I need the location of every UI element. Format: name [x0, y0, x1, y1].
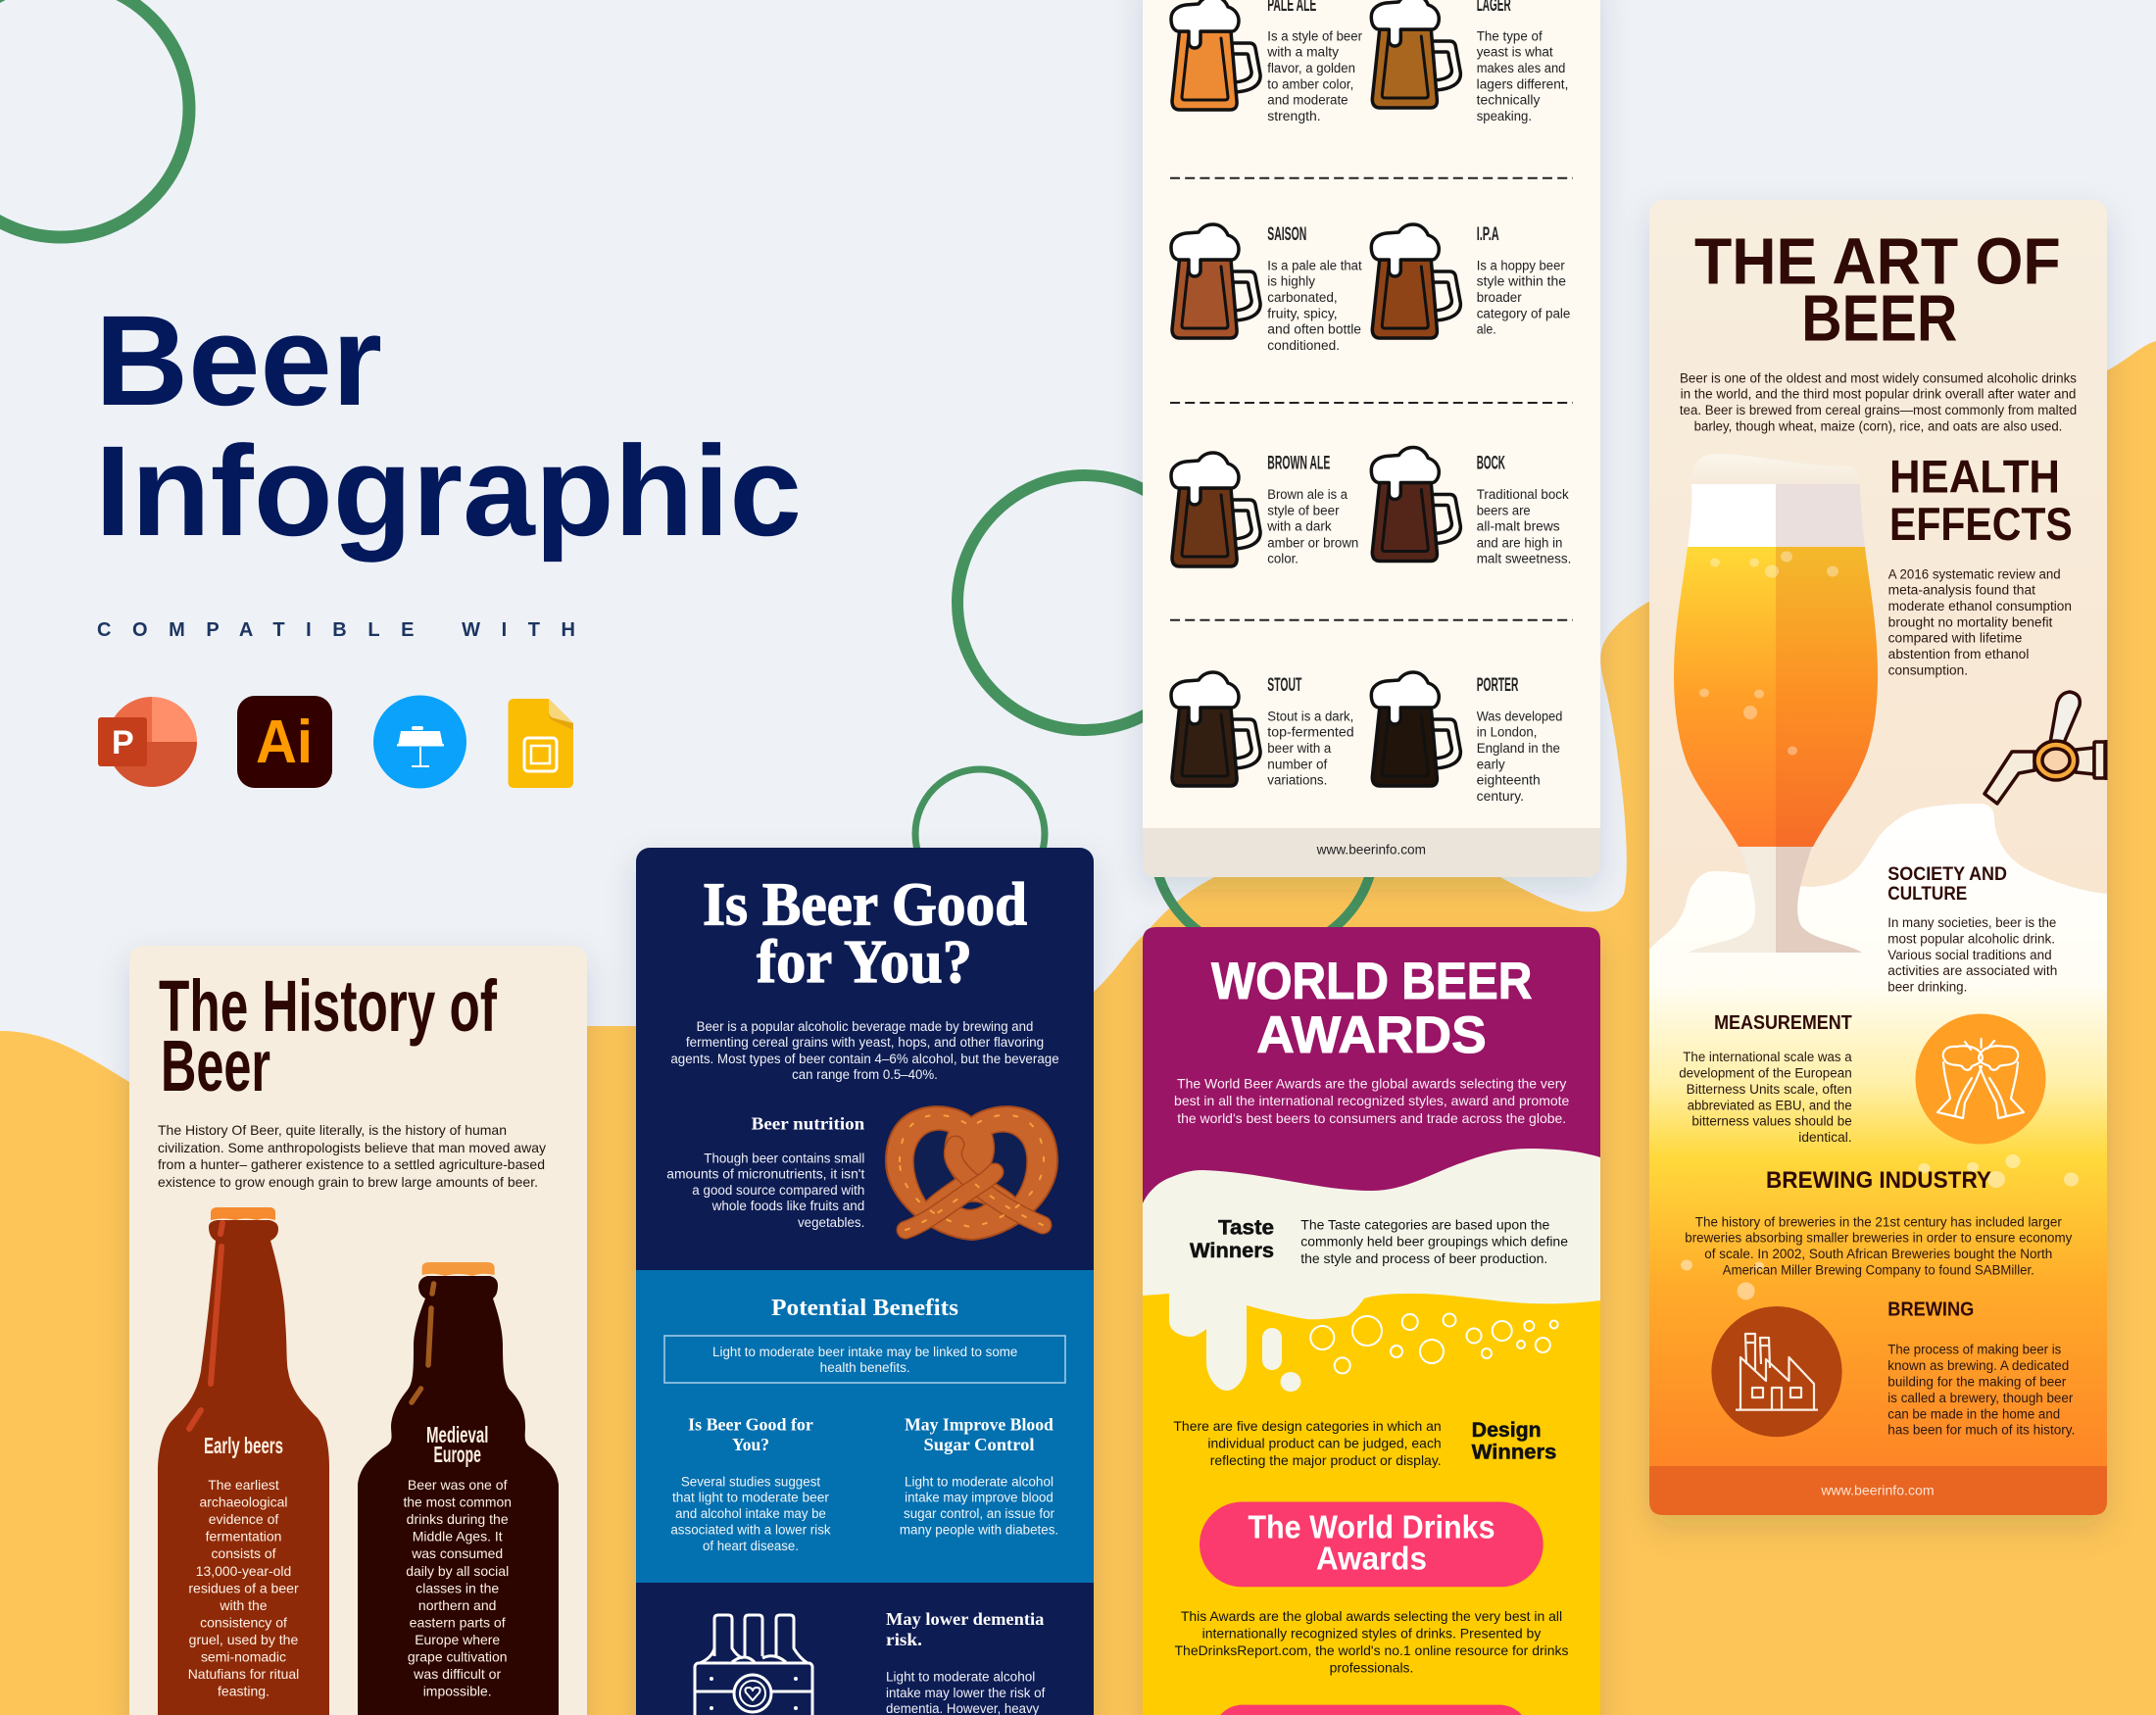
- style: brown ale: Brown ale is a: [1267, 487, 1348, 502]
- style: stout: Stout is a dark,: [1267, 709, 1353, 723]
- heading: the art of beer: THE ART OF: [1694, 224, 2061, 298]
- style: porter: PORTER: [1477, 675, 1519, 696]
- style: brown ale: with a dark: [1266, 519, 1332, 534]
- icon: Google Slides: [508, 699, 573, 788]
- taste winners: The Taste categories are based upon the: [1300, 1216, 1550, 1232]
- style: brown ale: BROWN ALE: [1267, 453, 1330, 473]
- panel: beer styles: [1143, 0, 1600, 877]
- art intro: Beer is one of the oldest and most widely consumed alcoholic drinks: [1680, 371, 2077, 386]
- measurement: MEASUREMENT: [1714, 1012, 1852, 1034]
- icon: cheers: [1915, 1013, 2046, 1145]
- style: saison: and often bottle: [1267, 322, 1361, 337]
- green ring behind awards card: [1153, 731, 1375, 953]
- green ring top left: [0, 0, 189, 237]
- health effects: A 2016 systematic review and: [1888, 566, 2061, 581]
- style: brown ale: amber or brown: [1267, 535, 1358, 550]
- style: ipa: [1371, 224, 1570, 338]
- footer url: www.beerinfo.com: [1820, 1483, 1935, 1497]
- beer nutrition text: a good source compared with: [692, 1183, 864, 1198]
- style: brown ale: color.: [1267, 551, 1298, 565]
- health effects: EFFECTS: [1889, 498, 2073, 550]
- society and culture: [1887, 864, 2057, 995]
- design winners: There are five design categories in which an: [1173, 1418, 1442, 1434]
- green ring centre large: [957, 475, 1212, 730]
- bottle: medieval europe: [358, 1262, 559, 1715]
- style: pale ale: [1171, 0, 1362, 123]
- style: saison: fruity, spicy,: [1267, 306, 1338, 320]
- style: ipa: category of pale: [1477, 306, 1570, 320]
- intro text: Beer is a popular alcoholic beverage made by brewing and: [697, 1019, 1033, 1034]
- style: pale ale: to amber color,: [1267, 76, 1353, 91]
- benefit: blood sugar control: sugar control, an issue for: [904, 1506, 1054, 1521]
- bottle: medieval europe: the most common: [403, 1494, 512, 1510]
- style: bock: [1371, 447, 1571, 565]
- awards intro: the world's best beers to consumers and trade across the globe.: [1177, 1110, 1566, 1126]
- society and culture: CULTURE: [1887, 884, 1967, 905]
- style: brown ale: style of beer: [1267, 503, 1340, 517]
- society and culture: SOCIETY AND: [1887, 864, 2007, 885]
- health effects: moderate ethanol consumption: [1888, 599, 2072, 613]
- society and culture: Various social traditions and: [1887, 948, 2052, 962]
- style: saison: [1171, 224, 1362, 353]
- title: [95, 288, 802, 563]
- heading: potential benefits: Potential Benefits: [771, 1296, 958, 1321]
- brewing industry: American Miller Brewing Company to found SABMiller.: [1723, 1262, 2034, 1277]
- benefit: blood sugar control: [900, 1415, 1058, 1537]
- benefit: is beer good for you: [670, 1415, 831, 1553]
- icon: Keynote: [373, 696, 466, 788]
- awards intro: best in all the international recognized styles, award and promote: [1174, 1093, 1570, 1108]
- bottle: early beers: semi-nomadic: [201, 1648, 286, 1664]
- taste winners: commonly held beer groupings which define: [1300, 1233, 1568, 1249]
- society and culture: In many societies, beer is the: [1887, 915, 2056, 930]
- heading: the art of beer: BEER: [1801, 282, 1957, 355]
- intro text: [670, 1019, 1059, 1082]
- drinks awards text: professionals.: [1330, 1660, 1413, 1676]
- measurement: The international scale was a: [1683, 1050, 1852, 1064]
- style: lager: technically: [1477, 93, 1541, 108]
- icon: bottle crate: [695, 1615, 812, 1715]
- bottle: early beers: archaeological: [200, 1494, 288, 1510]
- heading: the art of beer: [1694, 224, 2061, 355]
- bottle: medieval europe: Europe where: [415, 1632, 500, 1647]
- bottle: early beers: [158, 1207, 329, 1715]
- beer nutrition text: [666, 1113, 865, 1230]
- heading: is beer good for you: for You?: [757, 929, 972, 996]
- dementia text: May lower dementia: [886, 1609, 1045, 1629]
- icon: beer tap: [1984, 692, 2106, 804]
- measurement: [1679, 1012, 1852, 1145]
- style: stout: variations.: [1267, 773, 1327, 788]
- benefit: is beer good for you: of heart disease.: [703, 1539, 799, 1553]
- art intro: [1680, 371, 2077, 434]
- heading: is beer good for you: Is Beer Good: [703, 872, 1027, 939]
- panel: the art of beer: [1649, 200, 2107, 1515]
- taste winners: Winners: [1190, 1240, 1274, 1262]
- brewing industry: BREWING INDUSTRY: [1766, 1167, 1991, 1194]
- pill: second, cropped: [1213, 1705, 1529, 1715]
- health effects: compared with lifetime: [1888, 630, 2022, 645]
- intro text: fermenting cereal grains with yeast, hops, and other flavoring: [686, 1035, 1044, 1050]
- style: saison: carbonated,: [1267, 290, 1338, 305]
- style: porter: eighteenth: [1477, 773, 1541, 788]
- awards intro: The World Beer Awards are the global awards selecting the very: [1177, 1075, 1566, 1091]
- callout box: [664, 1336, 1065, 1383]
- brewing: is called a brewery, though beer: [1887, 1391, 2074, 1405]
- bottle: early beers: residues of a beer: [188, 1580, 299, 1595]
- bottle: medieval europe: Europe: [433, 1442, 481, 1467]
- beer nutrition text: Though beer contains small: [704, 1151, 864, 1165]
- taste winners: the style and process of beer production.: [1300, 1250, 1547, 1266]
- taste winners: [1190, 1216, 1568, 1266]
- subtitle: compatible with: COMPATIBLE WITH: [97, 619, 575, 641]
- beer nutrition text: amounts of micronutrients, it isn't: [666, 1166, 865, 1182]
- art intro: barley, though wheat, maize (corn), rice, and oats are also used.: [1694, 419, 2062, 434]
- style: porter: century.: [1477, 789, 1524, 804]
- pill: the world drinks awards: Awards: [1316, 1541, 1427, 1577]
- health effects: consumption.: [1888, 662, 1968, 677]
- style: porter: in London,: [1477, 725, 1537, 740]
- bottle: early beers: gruel, used by the: [189, 1632, 299, 1647]
- design winners: reflecting the major product or display.: [1210, 1452, 1442, 1468]
- style: porter: early: [1477, 757, 1505, 771]
- benefit: blood sugar control: Light to moderate alcohol: [905, 1474, 1054, 1490]
- section: potential benefits: [636, 1270, 1094, 1583]
- bottle: early beers: fermentation: [206, 1529, 281, 1544]
- bottle: early beers: evidence of: [209, 1511, 278, 1527]
- intro text: agents. Most types of beer contain 4–6% alcohol, but the beverage: [670, 1052, 1059, 1066]
- panel: world beer awards: [1143, 927, 1600, 1715]
- brewing industry: The history of breweries in the 21st century has included larger: [1695, 1214, 2062, 1229]
- bottle: medieval europe: impossible.: [423, 1684, 492, 1699]
- art intro: tea. Beer is brewed from cereal grains—most commonly from malted: [1680, 403, 2077, 417]
- brewing industry: of scale. In 2002, South African Breweries bought the North: [1704, 1247, 2052, 1261]
- bubbles in beer: [1681, 1154, 2079, 1299]
- taste winners: Taste: [1218, 1217, 1274, 1239]
- style: bock: and are high in: [1477, 535, 1562, 550]
- bottle: early beers: Early beers: [204, 1433, 283, 1458]
- style: lager: makes ales and: [1477, 61, 1565, 75]
- bottle: medieval europe: Middle Ages. It: [413, 1529, 503, 1544]
- drinks awards text: internationally recognized styles of drinks. Presented by: [1202, 1626, 1541, 1642]
- style: pale ale: Is a style of beer: [1267, 28, 1362, 43]
- history intro text: civilization. Some anthropologists believe that man moved away: [158, 1140, 546, 1155]
- style: ipa: broader: [1477, 290, 1522, 305]
- heading: world beer awards: AWARDS: [1256, 1006, 1487, 1064]
- style: stout: top-fermented: [1267, 725, 1354, 740]
- bottle: medieval europe: Medieval: [426, 1422, 488, 1447]
- benefit: blood sugar control: intake may improve blood: [905, 1490, 1054, 1505]
- art intro: in the world, and the third most popular drink overall after water and: [1681, 387, 2076, 402]
- history intro text: The History Of Beer, quite literally, is the history of human: [158, 1122, 507, 1138]
- title: Beer: [95, 288, 382, 432]
- measurement: development of the European: [1679, 1065, 1852, 1080]
- brewing: The process of making beer is: [1887, 1343, 2062, 1357]
- style: saison: SAISON: [1267, 224, 1306, 245]
- bottle: medieval europe: was consumed: [411, 1545, 503, 1561]
- bottle: medieval europe: daily by all social: [406, 1563, 509, 1579]
- style: stout: [1171, 672, 1354, 788]
- style: ipa: ale.: [1477, 322, 1496, 337]
- style: lager: yeast is what: [1477, 45, 1553, 60]
- style: porter: Was developed: [1477, 709, 1562, 723]
- brewing: building for the making of beer: [1887, 1375, 2067, 1390]
- style: pale ale: flavor, a golden: [1267, 61, 1355, 75]
- heading: world beer awards: WORLD BEER: [1211, 953, 1532, 1010]
- style: lager: lagers different,: [1477, 76, 1568, 91]
- health effects: abstention from ethanol: [1888, 647, 2029, 662]
- society and culture: activities are associated with: [1887, 963, 2057, 978]
- history intro text: from a hunter– gatherer existence to a settled agriculture-based: [158, 1156, 545, 1172]
- style: bock: beers are: [1477, 503, 1531, 517]
- bottle: early beers: feasting.: [218, 1684, 270, 1699]
- bubbles: [1310, 1313, 1558, 1373]
- foam wave: [1143, 1149, 1600, 1392]
- style: stout: number of: [1267, 757, 1328, 771]
- style: pale ale: strength.: [1267, 109, 1321, 123]
- brewing: known as brewing. A dedicated: [1887, 1358, 2069, 1373]
- bottle: medieval europe: drinks during the: [407, 1511, 509, 1527]
- pill: the world drinks awards: [1200, 1501, 1544, 1587]
- icon: Illustrator: [237, 696, 332, 788]
- beer nutrition text: Beer nutrition: [752, 1113, 865, 1133]
- illustration: beer glass: [1674, 454, 1878, 953]
- icon: pretzel: [886, 1106, 1057, 1240]
- icon: PowerPoint: P: [112, 724, 134, 761]
- dementia text: risk.: [886, 1630, 922, 1649]
- heading: is beer good for you: [703, 872, 1027, 996]
- panel: the history of beer: [129, 946, 587, 1715]
- bottle: medieval europe: grape cultivation: [408, 1648, 508, 1664]
- benefit: is beer good for you: You?: [732, 1435, 769, 1454]
- dementia text: intake may lower the risk of: [886, 1686, 1046, 1700]
- health effects: brought no mortality benefit: [1888, 614, 2053, 629]
- icon: PowerPoint: [98, 697, 197, 787]
- bottle: medieval europe: Beer was one of: [408, 1477, 508, 1493]
- icon: brewery factory: [1711, 1306, 1842, 1437]
- dementia text: Light to moderate alcohol: [886, 1670, 1035, 1685]
- history intro text: existence to grow enough grain to brew large amounts of beer.: [158, 1174, 538, 1190]
- style: pale ale: with a malty: [1266, 45, 1339, 60]
- footer band: [1649, 1466, 2107, 1515]
- measurement: abbreviated as EBU, and the: [1688, 1098, 1852, 1112]
- design winners: [1173, 1418, 1556, 1468]
- heading: the history of beer: The History of: [159, 965, 497, 1047]
- style: bock: malt sweetness.: [1477, 551, 1571, 565]
- measurement: Bitterness Units scale, often: [1687, 1082, 1852, 1097]
- drinks awards text: TheDrinksReport.com, the world's no.1 online resource for drinks: [1174, 1642, 1568, 1658]
- style: ipa: style within the: [1477, 274, 1566, 289]
- style: brown ale: [1171, 453, 1358, 566]
- brewing: BREWING: [1887, 1299, 1974, 1321]
- brewing industry: [1685, 1167, 2073, 1277]
- health effects: meta-analysis found that: [1888, 582, 2035, 597]
- heading: the history of beer: [159, 965, 497, 1106]
- callout box: Light to moderate beer intake may be linked to some: [712, 1345, 1017, 1359]
- bottle: early beers: The earliest: [208, 1477, 279, 1493]
- measurement: identical.: [1798, 1130, 1852, 1145]
- brewing: can be made in the home and: [1887, 1406, 2060, 1421]
- design winners: Winners: [1472, 1442, 1556, 1464]
- design winners: Design: [1472, 1419, 1542, 1442]
- bottle: medieval europe: classes in the: [416, 1580, 499, 1595]
- society and culture: beer drinking.: [1887, 980, 1967, 995]
- heading: world beer awards: [1211, 953, 1532, 1064]
- bottle: early beers: with the: [219, 1597, 268, 1613]
- style: lager: speaking.: [1477, 109, 1532, 123]
- pill: the world drinks awards: The World Drinks: [1248, 1509, 1495, 1545]
- bottle: early beers: consists of: [211, 1545, 276, 1561]
- style: lager: The type of: [1477, 28, 1543, 43]
- footer url: www.beerinfo.com: [1316, 843, 1426, 858]
- benefit: is beer good for you: and alcohol intake may be: [675, 1506, 826, 1521]
- brewing: has been for much of its history.: [1887, 1422, 2075, 1437]
- benefit: blood sugar control: May Improve Blood: [905, 1415, 1054, 1435]
- bottle: early beers: consistency of: [200, 1614, 287, 1630]
- health effects: HEALTH: [1889, 451, 2060, 503]
- style: stout: STOUT: [1267, 675, 1302, 696]
- drinks awards text: [1174, 1608, 1568, 1676]
- style: porter: [1371, 672, 1562, 804]
- white and amber liquid background: [1649, 804, 2107, 1466]
- drinks awards text: This Awards are the global awards selecting the very best in all: [1181, 1608, 1562, 1624]
- beer nutrition text: vegetables.: [798, 1215, 864, 1230]
- bottle: medieval europe: was difficult or: [413, 1666, 502, 1682]
- bottle: medieval europe: northern and: [418, 1597, 496, 1613]
- heading: the history of beer: Beer: [161, 1025, 270, 1106]
- style: ipa: Is a hoppy beer: [1477, 258, 1565, 272]
- style: bock: BOCK: [1477, 453, 1505, 473]
- benefit: blood sugar control: Sugar Control: [923, 1435, 1035, 1454]
- green ring behind blue card: [915, 769, 1045, 899]
- measurement: bitterness values should be: [1691, 1113, 1852, 1128]
- brewing industry: breweries absorbing smaller breweries in order to ensure economy: [1685, 1230, 2073, 1245]
- benefit: is beer good for you: that light to moderate beer: [672, 1490, 829, 1505]
- dementia text: [886, 1609, 1046, 1715]
- beer nutrition text: whole foods like fruits and: [711, 1199, 864, 1213]
- callout box: health benefits.: [820, 1360, 910, 1375]
- benefit: is beer good for you: Several studies suggest: [681, 1474, 820, 1490]
- style: saison: Is a pale ale that: [1267, 258, 1362, 272]
- style: bock: all-malt brews: [1477, 519, 1560, 534]
- panel: is beer good for you: [636, 848, 1094, 1715]
- style: saison: is highly: [1267, 274, 1315, 289]
- history intro text: [158, 1122, 546, 1190]
- bottle: medieval europe: eastern parts of: [410, 1614, 506, 1630]
- brewing: [1887, 1299, 2075, 1437]
- health effects: [1888, 451, 2073, 677]
- benefit: blood sugar control: many people with diabetes.: [900, 1522, 1058, 1537]
- society and culture: most popular alcoholic drink.: [1887, 931, 2055, 947]
- intro text: can range from 0.5–40%.: [792, 1067, 938, 1082]
- benefit: is beer good for you: Is Beer Good for: [688, 1415, 813, 1435]
- title: Infographic: [95, 418, 802, 563]
- bottle: early beers: Natufians for ritual: [188, 1666, 299, 1682]
- icon: Illustrator: Ai: [256, 709, 313, 776]
- bottle: early beers: 13,000-year-old: [196, 1563, 291, 1579]
- style: saison: conditioned.: [1267, 338, 1340, 353]
- style: ipa: I.P.A: [1477, 224, 1499, 245]
- benefit: is beer good for you: associated with a lower risk: [670, 1522, 831, 1537]
- style: stout: beer with a: [1267, 741, 1332, 756]
- style: bock: Traditional bock: [1477, 487, 1569, 502]
- awards intro: [1174, 1075, 1570, 1126]
- style: porter: England in the: [1477, 741, 1560, 756]
- design winners: individual product can be judged, each: [1207, 1436, 1442, 1451]
- style: pale ale: and moderate: [1267, 93, 1348, 108]
- style: lager: [1371, 0, 1568, 123]
